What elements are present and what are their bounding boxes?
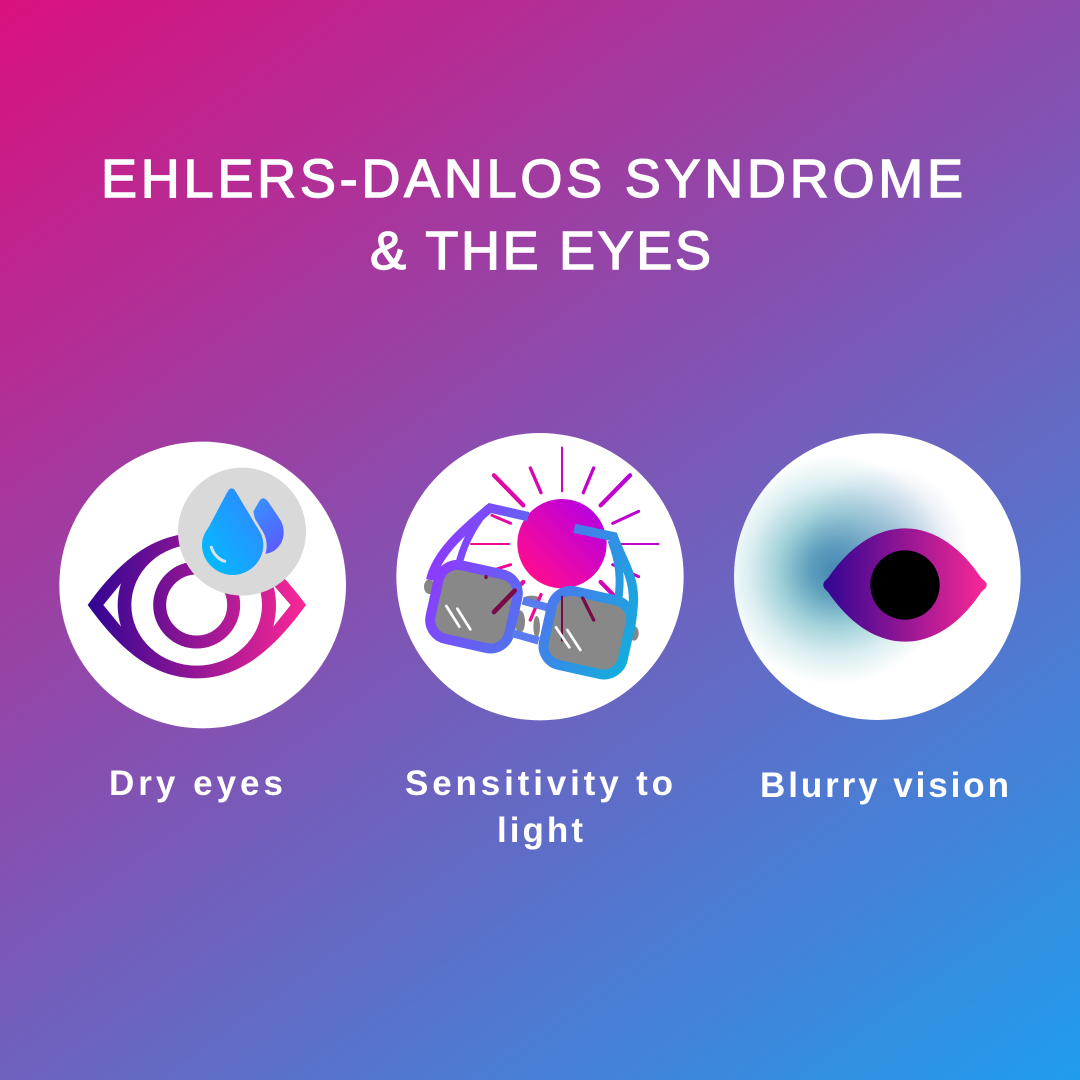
icon: white circle with eye and water drops [59,442,346,728]
icon: pupil [870,550,940,620]
icon: sun and sunglasses [396,433,684,720]
panel: blurry vision [734,433,1021,805]
icon: sun rays [471,447,659,620]
icon: eye outline [88,533,306,678]
title: EHLERS-DANLOS SYNDROME [101,149,963,209]
icon: lens glints [446,606,580,650]
icon: grey badge [178,468,306,596]
icon: right lens [540,587,635,678]
label: blurry vision: Blurry vision [760,766,1009,805]
label: dry eyes: Dry eyes [109,764,283,803]
label: sensitivity to light: light [497,811,583,850]
icon: large water drop [199,485,267,579]
icon: left lens [426,561,522,652]
icon: bridge [513,601,547,641]
icon: grey nubs [424,579,639,641]
icon: blurry eye [734,433,1021,720]
label: sensitivity to light: Sensitivity to [405,764,673,803]
panel: dry eyes [59,442,346,803]
icon: blurred circle [734,433,1021,720]
icon: rays seen through lenses [486,577,594,641]
icon: small water drop [253,498,284,554]
icon: eye shape [823,528,987,642]
title: & THE EYES [370,221,711,281]
label: sensitivity to light [405,764,673,850]
icon: sun [517,499,607,588]
panel: sensitivity to light [396,433,684,850]
title [101,149,963,281]
icon: sunglasses temples [431,508,633,637]
